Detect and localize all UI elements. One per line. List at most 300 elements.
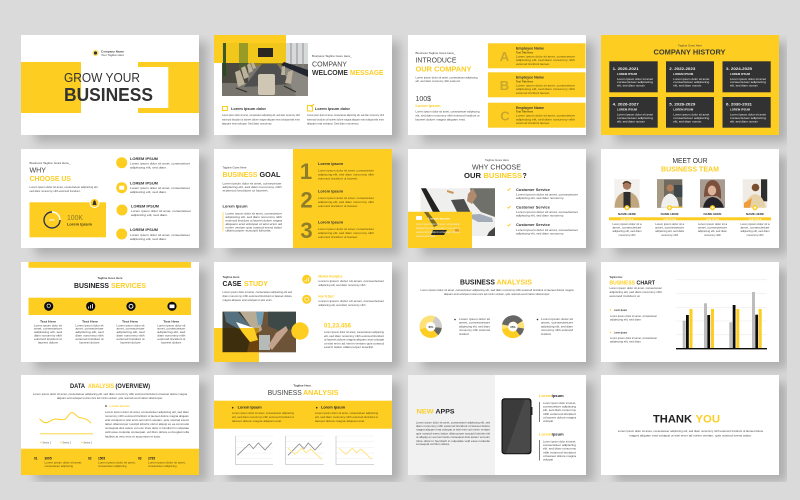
team member 2: NAME HERE	[661, 213, 679, 216]
text block: lorem right: Lorem Ipsum dolor	[315, 107, 351, 111]
employee C: adipiscing elit, sed diam nonummy nibh	[516, 117, 575, 121]
line chart: Series 3	[84, 442, 93, 444]
card 2028-2029: LOREM IPSUM	[673, 108, 694, 112]
service 1: Lorem ipsum dolor sit amet, consectetuer	[516, 192, 578, 196]
legend 1: nonummy nibh euismod	[459, 328, 490, 332]
slide: why choose our business	[408, 149, 586, 248]
heading	[654, 44, 726, 56]
legend 2: Lorem ipsum dolor sit	[541, 317, 573, 321]
team member 3: amet, consectetuer	[698, 226, 727, 230]
card 2020-2021: consectetuer adipiscing	[617, 80, 654, 84]
stat 02: 1505	[98, 456, 105, 460]
team member 1: nonummy nibh	[618, 233, 636, 237]
intro text: sed diam nonummy nibh euismod tincidunt.	[30, 189, 81, 193]
closing text: magna aliquam erat volutpat ut wisi enim ad minim veniam, quis nostrud exerci tation.	[629, 433, 752, 437]
intro text	[416, 75, 478, 83]
employee A: Lorem ipsum dolor sit amet, consectetuer	[516, 54, 575, 58]
heading: Tagline Goes Here	[678, 44, 703, 48]
band item left: elit, sed diam nonummy nibh euismod tincidunt ut	[232, 415, 294, 419]
title: THANK	[653, 413, 692, 425]
card 2026-2027: elit, sed diam nonum	[617, 119, 646, 123]
slide: grow your business cover	[21, 35, 199, 135]
slide: introduce our company	[408, 35, 586, 135]
feature 1: LOREM IPSUM	[130, 157, 158, 161]
card 2028-2029: 5. 2028-2029	[669, 102, 696, 106]
service column 3	[116, 319, 145, 344]
text item 2: ut laoreet dolore magna	[543, 454, 576, 458]
team member 1: NAME HERE	[618, 213, 636, 216]
slide: why choose us	[21, 149, 199, 248]
heading	[30, 161, 71, 183]
team member 4: amet, consectetuer	[740, 226, 770, 230]
stat 01,23,456: elit, sed diam nonummy nibh euismod tincidunt	[324, 334, 384, 338]
team member 4: NAME HERE	[746, 213, 764, 216]
stat 03: 2795	[148, 456, 155, 460]
feature 3: Lorem ipsum dolor sit amet, consectetuer	[131, 209, 191, 213]
heading: COMPANY HISTORY	[654, 47, 726, 56]
service column 1: laoreet dolore	[38, 340, 58, 344]
goal 2: adipiscing elit, sed diam nonummy nibh	[318, 200, 374, 204]
photo: laptop on desk	[420, 188, 495, 236]
employee B: Lorem ipsum dolor sit amet, consectetuer	[516, 83, 575, 87]
service column 1: Text Here	[40, 319, 56, 323]
employee C: euismod tincidunt laoreet.	[516, 121, 550, 125]
intro text: Lorem ipsum dolor sit amet, consectetuer adipiscing elit	[30, 185, 98, 189]
stat 01,23,456	[291, 322, 384, 349]
intro text: Lorem ipsum dolor sit amet, consectetuer adipiscing elit, sed diam nonummy nibh euismod tincidunt ut laoreet dolore magna	[33, 392, 187, 396]
icon: phone mockup	[502, 398, 532, 454]
heading: Tagline Goes Here	[98, 276, 123, 280]
team member 2: JOB TITLE	[663, 219, 677, 221]
legend item 2: adipiscing elit, sed diam	[610, 340, 641, 344]
company name: Company Name	[101, 50, 125, 54]
goal 1: 1	[300, 159, 312, 184]
service column 2	[76, 319, 104, 344]
slide: company welcome message	[214, 35, 392, 135]
band item left: Lorem Ipsum	[238, 406, 262, 410]
team member 3	[698, 179, 727, 237]
text block: consequat vel illum dolore.	[416, 442, 450, 446]
service column 1	[34, 319, 62, 344]
intro text: aliquam erat volutpat ut wisi enim ad minim veniam, quis nostrud exerci tation ullamcorper.	[57, 396, 163, 400]
text item 2: Lorem ipsum dolor sit amet,	[543, 440, 576, 444]
employee C: Text Title Here	[516, 111, 534, 114]
feature 1: Lorem ipsum dolor sit amet, consectetuer	[130, 162, 190, 166]
slide: company history	[601, 35, 779, 135]
service column 1: diam nonummy nibh	[34, 334, 62, 338]
employee C: C	[500, 108, 510, 123]
goal 3: 3	[300, 218, 313, 243]
intro text: elit, sed diam nonummy nibh euismod.	[416, 79, 461, 83]
card 2024-2025: elit, sed diam nonum	[730, 84, 759, 88]
text block: lorem left: Lorem ipsum dolor sit amet, consectetuer adipiscing elit, sed diam nonummy nibh	[222, 113, 300, 117]
legend 2: amet, consectetuer	[541, 321, 573, 325]
team member 3: nonummy nibh	[704, 233, 721, 237]
team member 1: adipiscing elit, sed diam	[612, 229, 642, 233]
legend item 2: Lorem ipsum dolor sit amet, consectetuer	[610, 336, 657, 340]
service 1: Customer Service	[516, 188, 550, 192]
stat 03: 03	[138, 456, 142, 460]
slide: business analysis donuts	[408, 262, 586, 362]
heading	[222, 165, 281, 179]
employee A: Text Title Here	[516, 51, 534, 54]
title: GROW YOUR	[64, 70, 140, 85]
service column 3: Text Here	[122, 319, 138, 323]
heading: CHART	[636, 281, 655, 287]
intro text: magna aliquam erat volutpat ut wisi enim.	[222, 298, 273, 302]
intro text: Lorem ipsum dolor sit amet, consectetuer	[610, 286, 662, 290]
intro text: adipiscing elit, sed diam nonummy nibh	[610, 290, 662, 294]
team member 1: amet, consectetuer	[612, 226, 642, 230]
intro text: euismod tincidunt ut.	[610, 294, 641, 298]
legend 2	[537, 317, 573, 336]
heading: BUSINESS	[268, 390, 302, 397]
card 2024-2025: Lorem ipsum dolor sit amet	[730, 77, 766, 81]
stat 03: consectetuer adipiscing	[148, 464, 177, 468]
card 2030-2031	[722, 97, 771, 128]
band item right	[315, 406, 378, 423]
text block: Lorem ipsum dolor sit amet, consectetuer adipiscing elit, sed	[416, 420, 490, 424]
heading	[416, 408, 455, 416]
heading: MESSAGE	[350, 70, 384, 77]
intro text	[222, 182, 282, 192]
text block	[416, 420, 490, 446]
intro text: Lorem ipsum dolor sit amet, consectetuer	[222, 182, 282, 186]
intro text	[420, 288, 574, 296]
how to start	[302, 294, 384, 307]
feature 3: adipiscing elit, sed diam.	[131, 213, 168, 217]
employee B: adipiscing elit, sed diam nonummy nibh	[516, 87, 575, 91]
service column 4: amet, consectetuer	[157, 327, 185, 331]
text block: lorem right: Lorem ipsum dolor sit amet, consectetuer adipiscing elit, sed diam nonummy nibh	[307, 113, 384, 117]
feature 4: adipiscing elit, sed diam.	[130, 237, 167, 241]
quoted text: Lorem ipsum dolor sit amet, consectetuer	[226, 212, 282, 216]
quoted text: Lorem Ipsum	[222, 204, 248, 208]
company name: Your Tagline Here	[101, 53, 125, 57]
service column 3: laoreet dolore	[120, 340, 141, 344]
team member 2: Lorem ipsum dolor sit a	[655, 222, 685, 226]
service column 1: Lorem ipsum dolor sit	[34, 323, 62, 327]
service column 3: adipiscing elit, sed	[116, 330, 145, 334]
team member 1: Lorem ipsum dolor sit a	[612, 222, 642, 226]
card 2024-2025: 3. 2024-2025	[726, 67, 752, 71]
card 2022-2023: Lorem ipsum dolor sit amet	[673, 77, 710, 81]
stat: 100$: laoreet dolore magna aliquam erat.	[416, 117, 466, 121]
stat 01: 3005	[44, 456, 52, 460]
goal 2: 2	[300, 188, 313, 213]
text item 1: Ipsum	[552, 394, 564, 398]
heading	[312, 54, 384, 77]
heading	[460, 279, 532, 286]
text item 2: Ipsum	[552, 432, 564, 436]
heading: INTRODUCE	[416, 56, 456, 64]
yellow frame shapes	[21, 62, 199, 113]
donut chart 1: 45%	[428, 325, 434, 329]
text item 1: elit, sed diam nonummy	[543, 408, 577, 412]
closing text: Lorem ipsum dolor sit amet, consectetuer adipiscing elit, sed diam nonummy nibh euismod tincidunt ut laoreet dolore	[618, 429, 764, 433]
stat panel 100K: 100K	[67, 213, 83, 222]
legend 1: Lorem ipsum dolor sit	[459, 317, 490, 321]
title: BUSINESS	[64, 85, 153, 105]
stat 02: Lorem ipsum dolor sit amet,	[98, 460, 136, 464]
heading	[464, 158, 527, 180]
band item right: elit, sed diam nonummy nibh euismod tincidunt ut	[315, 415, 378, 419]
stat 01,23,456: ut laoreet dolore magna aliquam erat volutpat	[324, 338, 384, 342]
heading: Business Tagline Goes Here_	[416, 51, 456, 55]
text item 1	[539, 394, 577, 423]
stat: 100$	[416, 94, 480, 121]
employee B: euismod tincidunt laoreet.	[516, 91, 550, 95]
feature 2: LOREM IPSUM	[130, 181, 158, 185]
goal 2	[300, 188, 374, 213]
slide: case study	[214, 262, 392, 362]
slide: meet our business team	[601, 149, 779, 248]
feature 4: Lorem ipsum dolor sit amet, consectetuer	[130, 233, 190, 237]
service column 2: Lorem ipsum dolor sit	[76, 323, 104, 327]
job title bar	[609, 217, 771, 220]
card 2028-2029: consectetuer adipiscing	[673, 116, 710, 120]
text item 1: volutpat	[543, 419, 553, 423]
goal 1	[300, 159, 374, 184]
slide: thank you	[601, 375, 779, 475]
service 3: adipiscing elit, sed diam nonummy.	[516, 232, 564, 236]
bar chart	[676, 280, 767, 349]
band item right: laoreet dolore magna aliquam erat.	[315, 419, 365, 423]
yellow overlay panel	[408, 212, 495, 248]
team member 4: JOB TITLE	[748, 219, 762, 221]
service 3: Lorem ipsum dolor sit amet, consectetuer	[516, 228, 578, 232]
stat 01: consectetuer adipiscing	[44, 464, 73, 468]
service column 3: Lorem ipsum dolor sit	[116, 323, 145, 327]
team member 2: adipiscing elit, sed diam	[655, 229, 685, 233]
slide: business chart	[601, 262, 779, 362]
card 2022-2023	[666, 61, 714, 92]
stat 01,23,456: exerci tation ullamcorper suscipit.	[324, 345, 374, 349]
band item left: laoreet dolore magna aliquam erat.	[232, 419, 282, 423]
service column 4: diam nonummy nibh	[157, 334, 186, 338]
how to start: How To Start	[318, 294, 334, 298]
employee A: adipiscing elit, sed diam nonummy nibh	[516, 58, 575, 62]
card 2022-2023: elit, sed diam nonum	[673, 84, 702, 88]
market analytics: adipiscing elit, sed diam nonummy nibh	[318, 283, 366, 287]
text block: tation ullamcorper suscipit lobortis nisl ut aliquip ex ea commodo	[105, 422, 189, 426]
intro text: aliquam erat volutpat ut wisi enim ad minim veniam, quis nostrud exerci tation ullamcorper.	[444, 292, 550, 296]
card 2020-2021: 1. 2020-2021	[613, 67, 639, 71]
card 2028-2029: elit, sed diam nonum	[673, 119, 702, 123]
card 2028-2029: Lorem ipsum dolor sit amet	[673, 112, 710, 116]
goal 3: Lorem Ipsum	[318, 220, 343, 224]
service column 4	[157, 319, 186, 344]
card 2020-2021: Lorem ipsum dolor sit amet	[617, 77, 653, 81]
title	[64, 70, 153, 105]
service column 1: euismod tincidunt ut	[34, 337, 62, 341]
quoted text: minim veniam quis nostrud exerci tation	[226, 226, 282, 230]
goal 3: Lorem ipsum dolor sit amet, consectetuer	[318, 227, 374, 231]
heading: COMPANY	[312, 59, 347, 68]
text item 2	[539, 432, 577, 462]
heading: STUDY	[244, 281, 268, 288]
service column 3: euismod tincidunt ut	[116, 337, 145, 341]
photo: meeting room	[222, 43, 308, 96]
feature 2: Lorem ipsum dolor sit amet, consectetuer	[130, 186, 190, 190]
text block	[105, 404, 189, 438]
goal 1: Lorem ipsum dolor sit amet, consectetuer	[318, 168, 374, 172]
heading: Tagline Here	[610, 275, 623, 279]
team member 2: amet, consectetuer	[655, 226, 684, 230]
stat 01,23,456: Lorem ipsum dolor sit amet, consectetuer adipiscing	[324, 330, 384, 334]
stat: 100$: elit, sed diam nonummy nibh euismod tincidunt ut	[416, 113, 480, 117]
slide: new apps	[408, 375, 586, 475]
employee A	[488, 43, 586, 68]
employee A: A	[500, 49, 510, 64]
slide: business analysis line charts	[214, 375, 392, 475]
heading: BUSINESS	[222, 172, 258, 179]
line chart 1	[236, 436, 273, 465]
goal 1: Lorem Ipsum	[318, 162, 343, 166]
text item 2: elit, sed diam nonummy	[543, 447, 577, 451]
team member 3: adipiscing elit, sed diam	[698, 229, 727, 233]
goal 1: euismod tincidunt ut laoreet.	[318, 176, 358, 180]
intro text: euismod tincidunt ut laoreet.	[222, 188, 269, 192]
service column 3: diam nonummy nibh	[116, 334, 145, 338]
text block: lorem left: Lorem Ipsum dolor	[231, 107, 267, 111]
slide: business goal	[214, 149, 392, 248]
intro text: Lorem ipsum dolor sit amet, consectetuer adipiscing	[416, 75, 478, 79]
stat 03: Lorem ipsum dolor sit amet,	[148, 460, 186, 464]
team member 2: nonummy nibh	[661, 233, 678, 237]
yellow overlay panel: euismod tincidunt ut laoreet dolore	[416, 230, 460, 234]
intro text: Lorem ipsum dolor sit amet, consectetuer adipiscing elit, sed diam nonummy nibh euismod tincidunt ut laoreet dolore magna	[420, 288, 574, 292]
text block: velit esse molestie consequat, vel illum dolore eu feugiat nulla	[105, 430, 189, 434]
intro text	[33, 392, 187, 400]
market analytics: Lorem ipsum dolor sit amet, consectetuer	[318, 279, 384, 283]
employee A: Employee Name	[516, 46, 544, 50]
stat 01	[34, 456, 82, 468]
card 2026-2027: consectetuer adipiscing	[617, 116, 654, 120]
text block: quis nostrud exerci tation ullamcorper suscipit lobortis nisl	[416, 431, 490, 435]
how to start: Lorem ipsum dolor sit amet, consectetuer	[318, 299, 384, 303]
line chart: Series 2	[62, 442, 72, 444]
heading: WHY CHOOSE	[472, 162, 521, 172]
heading: OUR COMPANY	[416, 66, 472, 73]
quoted text: aliquam erat volutpat ut wisi enim ad	[226, 222, 282, 226]
closing text	[618, 429, 764, 437]
stat 01,23,456: ut wisi enim ad minim veniam quis nostrud	[324, 341, 384, 345]
feature 1	[116, 157, 190, 170]
intro text	[610, 286, 662, 298]
text block: Lorem ipsum dolor sit amet, consectetuer adipiscing elit, sed diam	[105, 410, 189, 414]
service column 2: Text Here	[82, 319, 98, 323]
service column 2: adipiscing elit, sed	[76, 330, 104, 334]
title: YOU	[696, 413, 720, 425]
text block: magna aliquam erat volutpat ut wisi enim ad minim veniam	[416, 428, 490, 432]
service column 4: Lorem ipsum dolor sit	[157, 323, 185, 327]
text item 2: consectetuer adipiscing	[543, 443, 576, 447]
service column 2: euismod tincidunt ut	[76, 337, 104, 341]
text block: lorem left: aliquam erat volutpat. Sed diam nonummy.	[222, 122, 272, 126]
employee B: B	[500, 78, 509, 93]
goal 1: adipiscing elit, sed diam nonummy nibh	[318, 172, 374, 176]
legend 1: adipiscing elit, sed diam	[459, 324, 490, 328]
legend item 1	[610, 308, 657, 322]
feature 1: adipiscing elit, sed diam.	[130, 166, 167, 170]
card 2024-2025: consectetuer adipiscing	[730, 80, 767, 84]
service 2	[508, 206, 578, 218]
heading: BUSINESS	[74, 283, 109, 290]
line chart	[40, 412, 93, 444]
stat panel 100K: Lorem Ipsum	[67, 222, 92, 226]
donut chart 2: 65%	[510, 325, 516, 329]
title	[653, 413, 720, 425]
text block: Lorem Ipsum	[110, 404, 130, 408]
text block: diam nonummy nibh euismod tincidunt ut laoreet dolore	[416, 424, 490, 428]
heading: BUSINESS TEAM	[661, 167, 719, 174]
service 2: Customer Service	[516, 206, 550, 210]
team member 3: JOB TITLE	[706, 219, 720, 221]
text block: consequat duis autem vel eum iriure dolor in hendrerit in vulputate	[105, 426, 189, 430]
yellow overlay panel: Lorem ipsum dolor sit amet, consectetuer	[416, 222, 460, 226]
heading: CASE	[222, 281, 242, 288]
quoted text	[222, 204, 282, 232]
heading: Tagline Here	[222, 275, 240, 279]
heading: GOAL	[260, 172, 281, 179]
heading	[661, 156, 719, 174]
icon: badge	[90, 198, 100, 208]
heading: NEW	[416, 408, 434, 416]
yellow overlay panel: adipiscing elit, sed diam nonummy	[416, 226, 461, 230]
stat: 100$: Lorem ipsum dolor sit amet, consectetuer adipiscing	[416, 109, 480, 113]
heading	[416, 51, 472, 73]
team member 1	[612, 179, 642, 237]
yellow overlay panel: Lorem Ipsum	[428, 216, 451, 220]
feature 3	[116, 204, 191, 217]
text item 2: Lorem	[539, 432, 552, 436]
quoted text: ullamcorper suscipit lobortis.	[226, 228, 272, 232]
heading: DATA	[70, 384, 86, 390]
card 2024-2025: LOREM IPSUM	[730, 72, 750, 76]
service column 4: euismod tincidunt ut	[157, 337, 185, 341]
text item 1: Lorem ipsum dolor sit amet,	[543, 401, 576, 405]
band item right: Lorem ipsum dolor sit amet, consectetuer adipiscing	[315, 411, 378, 415]
service column 2: laoreet dolore	[80, 340, 100, 344]
intro text: adipiscing elit, sed diam nonummy nibh	[222, 185, 282, 189]
team member 3: Lorem ipsum dolor sit a	[698, 222, 727, 226]
heading	[610, 275, 655, 287]
text block: iriure dolor in hendrerit in vulputate velit esse molestie	[416, 439, 490, 443]
team member 3: NAME HERE	[704, 213, 722, 216]
intro text: diam nonummy nibh euismod tincidunt ut laoreet dolore	[222, 294, 292, 298]
legend item 1: Lorem Ipsum	[614, 308, 627, 312]
team member 4: nonummy nibh	[746, 233, 764, 237]
employee B: Employee Name	[516, 76, 544, 80]
card 2026-2027: Lorem ipsum dolor sit amet	[617, 112, 653, 116]
donut chart 2	[505, 318, 521, 335]
yellow overlay panel	[214, 328, 259, 362]
legend 2: tincidunt	[541, 332, 551, 336]
heading	[222, 275, 268, 288]
legend item 1: Lorem ipsum dolor sit amet, consectetuer	[610, 314, 657, 318]
card 2024-2025	[722, 61, 771, 92]
card 2020-2021	[609, 61, 658, 92]
employee A: euismod tincidunt laoreet.	[516, 62, 550, 66]
legend item 2	[610, 330, 657, 344]
card 2022-2023: LOREM IPSUM	[673, 72, 694, 76]
heading: Business Tagline Goes Here_	[30, 161, 71, 165]
company name	[101, 50, 125, 57]
icon: company logo	[92, 50, 99, 56]
quoted text: adipiscing elit, sed diam nonummy nibh	[226, 215, 282, 219]
feature 3: LOREM IPSUM	[131, 204, 159, 208]
